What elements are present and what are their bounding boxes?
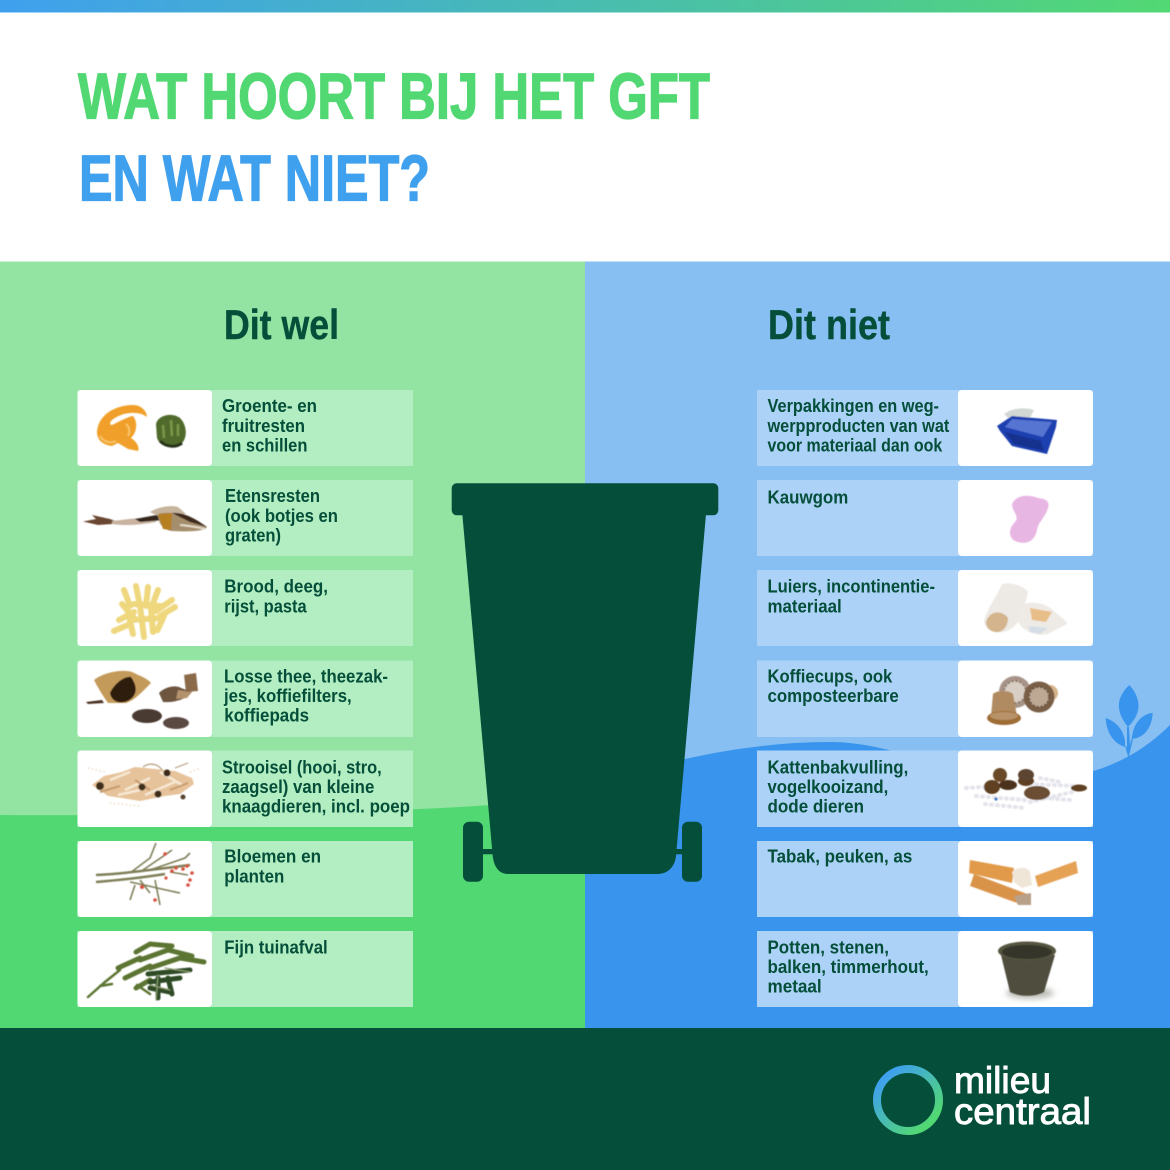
top gradient bar bbox=[0, 0, 1170, 12]
text: knaagdieren, incl. poep bbox=[222, 796, 410, 816]
item: kattenbakvulling bbox=[757, 750, 1093, 827]
text bbox=[222, 396, 317, 456]
logo ring bbox=[877, 1069, 939, 1131]
item: losse thee en koffie bbox=[78, 660, 413, 737]
photo: coffee and tea bbox=[86, 671, 198, 729]
heading: dit niet: Dit niet bbox=[768, 301, 890, 348]
panel: dit wel background bbox=[0, 262, 585, 1028]
text: materiaal bbox=[768, 596, 842, 616]
item: tabak bbox=[757, 841, 1093, 917]
item: kauwgom bbox=[757, 480, 1093, 556]
item: verpakkingen bbox=[757, 390, 1093, 466]
text: jes, koffiefilters, bbox=[223, 686, 352, 706]
text: Kauwgom bbox=[768, 487, 848, 507]
logo: milieu centraal bbox=[877, 1060, 1091, 1132]
text bbox=[224, 577, 328, 616]
text: (ook botjes en bbox=[225, 506, 338, 526]
title bbox=[78, 60, 710, 215]
text: graten) bbox=[225, 526, 281, 546]
item: bloemen en planten bbox=[78, 841, 413, 917]
text: Verpakkingen en weg- bbox=[768, 396, 939, 416]
text: rijst, pasta bbox=[224, 596, 308, 616]
icon: wheelie bin bbox=[452, 483, 718, 882]
text: composteerbare bbox=[768, 686, 899, 706]
photo: plant pot bbox=[998, 942, 1056, 999]
text bbox=[224, 847, 321, 886]
photo: chewing gum bbox=[1010, 496, 1049, 543]
text: zaagsel) van kleine bbox=[222, 777, 374, 797]
text: Brood, deeg, bbox=[224, 577, 328, 597]
text: Kattenbakvulling, bbox=[768, 757, 908, 777]
title: WAT HOORT BIJ HET GFT bbox=[78, 60, 710, 133]
text bbox=[767, 396, 949, 456]
item: fijn tuinafval bbox=[78, 931, 413, 1007]
text: planten bbox=[224, 866, 284, 886]
text bbox=[768, 757, 908, 816]
text: balken, timmerhout, bbox=[768, 957, 929, 977]
text: Etensresten bbox=[225, 486, 320, 506]
text: en schillen bbox=[222, 436, 308, 456]
text: Fijn tuinafval bbox=[224, 937, 328, 957]
text: Potten, stenen, bbox=[768, 937, 889, 957]
item: potten, stenen bbox=[757, 931, 1093, 1007]
icon: plant bbox=[1106, 685, 1153, 758]
footer band bbox=[0, 1028, 1170, 1170]
text: Groente- en bbox=[222, 396, 317, 416]
photo: blue basket bbox=[997, 408, 1057, 454]
text: vogelkooizand, bbox=[768, 777, 888, 797]
photo: diapers bbox=[984, 583, 1067, 635]
text bbox=[223, 666, 388, 726]
text bbox=[225, 486, 338, 546]
text bbox=[768, 666, 899, 706]
text: koffiepads bbox=[224, 706, 309, 726]
logo wordmark: milieu bbox=[954, 1060, 1051, 1101]
text: Losse thee, theezak- bbox=[224, 666, 388, 686]
photo: fish bones bbox=[83, 506, 207, 531]
text bbox=[768, 937, 929, 996]
text: metaal bbox=[768, 976, 822, 996]
item: etensresten bbox=[78, 480, 413, 556]
text: werpproducten van wat bbox=[767, 416, 949, 436]
photo: coffee cups bbox=[987, 676, 1058, 725]
text bbox=[768, 577, 935, 616]
text: Bloemen en bbox=[224, 847, 321, 867]
text: dode dieren bbox=[768, 796, 864, 816]
photo: pasta bbox=[114, 586, 175, 637]
title: EN WAT NIET? bbox=[79, 142, 430, 215]
item: brood, deeg, rijst, pasta bbox=[78, 570, 413, 646]
heading: dit wel: Dit wel bbox=[224, 301, 339, 348]
panel: dit niet background bbox=[585, 262, 1170, 1028]
logo wordmark bbox=[954, 1060, 1091, 1132]
item: strooisel bbox=[78, 750, 413, 827]
text bbox=[222, 757, 410, 816]
item: groente- en fruitresten bbox=[78, 390, 413, 466]
text: voor materiaal dan ook bbox=[768, 436, 943, 456]
text: Strooisel (hooi, stro, bbox=[222, 757, 382, 777]
text: Koffiecups, ook bbox=[768, 666, 893, 686]
photo: cigarette butts bbox=[969, 860, 1078, 905]
photo: cat litter bbox=[966, 768, 1087, 808]
text: fruitresten bbox=[222, 416, 305, 436]
item: koffiecups bbox=[757, 660, 1093, 737]
text: Luiers, incontinentie- bbox=[768, 577, 935, 597]
item: luiers bbox=[757, 570, 1093, 646]
photo: orange peel and squash bbox=[97, 405, 186, 451]
logo wordmark: centraal bbox=[954, 1091, 1091, 1132]
text: Tabak, peuken, as bbox=[768, 847, 912, 867]
photo: garden cuttings bbox=[88, 944, 204, 1000]
photo: wood shavings bbox=[88, 763, 200, 806]
photo: twigs with berries bbox=[96, 843, 194, 905]
